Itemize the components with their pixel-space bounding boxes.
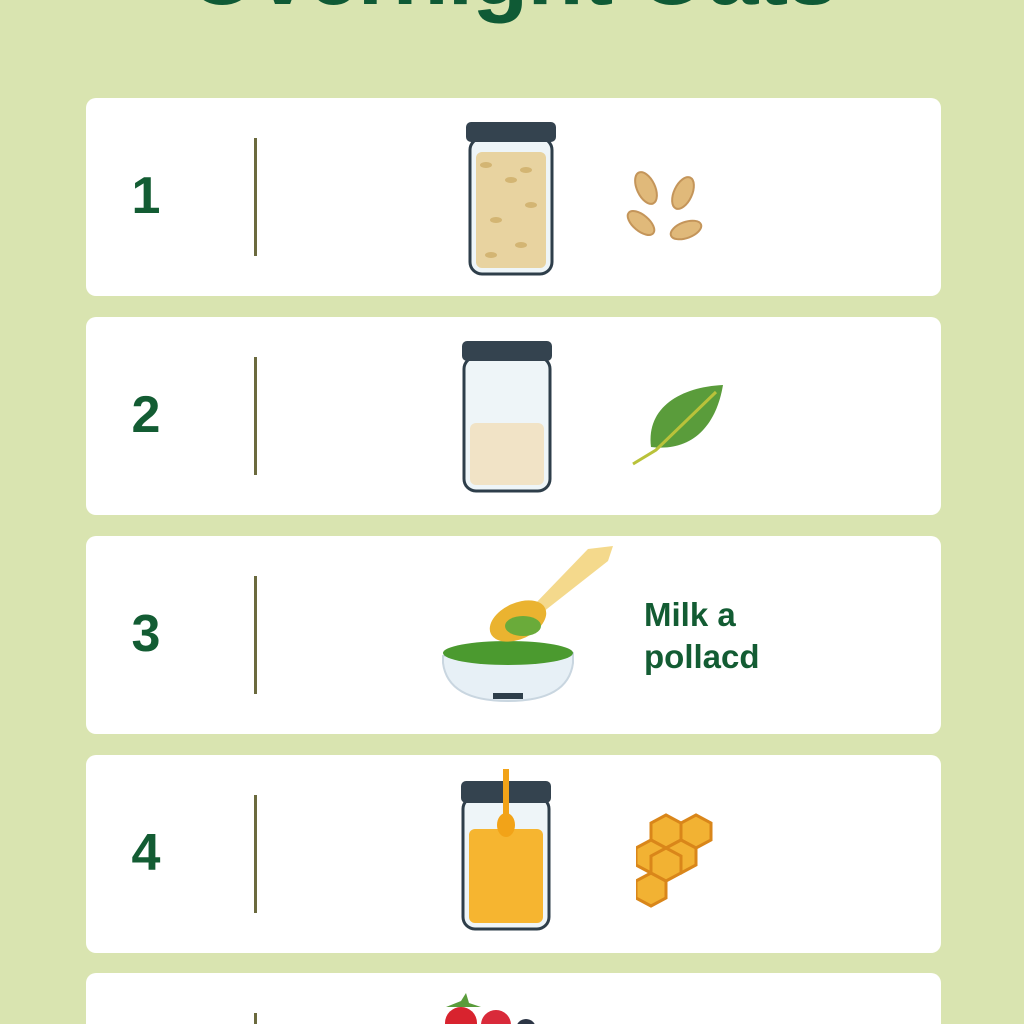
icon: honeycomb bbox=[636, 813, 712, 908]
panel: step 2 bbox=[86, 317, 941, 515]
number 3: 3 bbox=[132, 605, 160, 663]
panel: step 1 bbox=[86, 98, 941, 296]
number 4: 4 bbox=[132, 824, 160, 882]
number 2: 2 bbox=[132, 386, 160, 444]
icon: bowl with spoon bbox=[442, 546, 613, 702]
icon: leaf bbox=[632, 385, 723, 466]
panel: step 3 bbox=[86, 536, 941, 734]
number 1: 1 bbox=[132, 167, 160, 225]
text: step 3 label: Milk a bbox=[644, 596, 736, 633]
panel: step 5 bbox=[86, 973, 941, 1024]
panel: step 4 bbox=[86, 755, 941, 953]
text: step 3 label bbox=[644, 596, 760, 675]
text: step 3 label: pollacd bbox=[644, 638, 760, 675]
icon: oats jar bbox=[466, 122, 556, 276]
icon: milk jar bbox=[462, 341, 552, 492]
icon: oat grains bbox=[626, 171, 702, 240]
icon: honey jar bbox=[461, 769, 551, 930]
icon: berries bbox=[445, 993, 535, 1024]
